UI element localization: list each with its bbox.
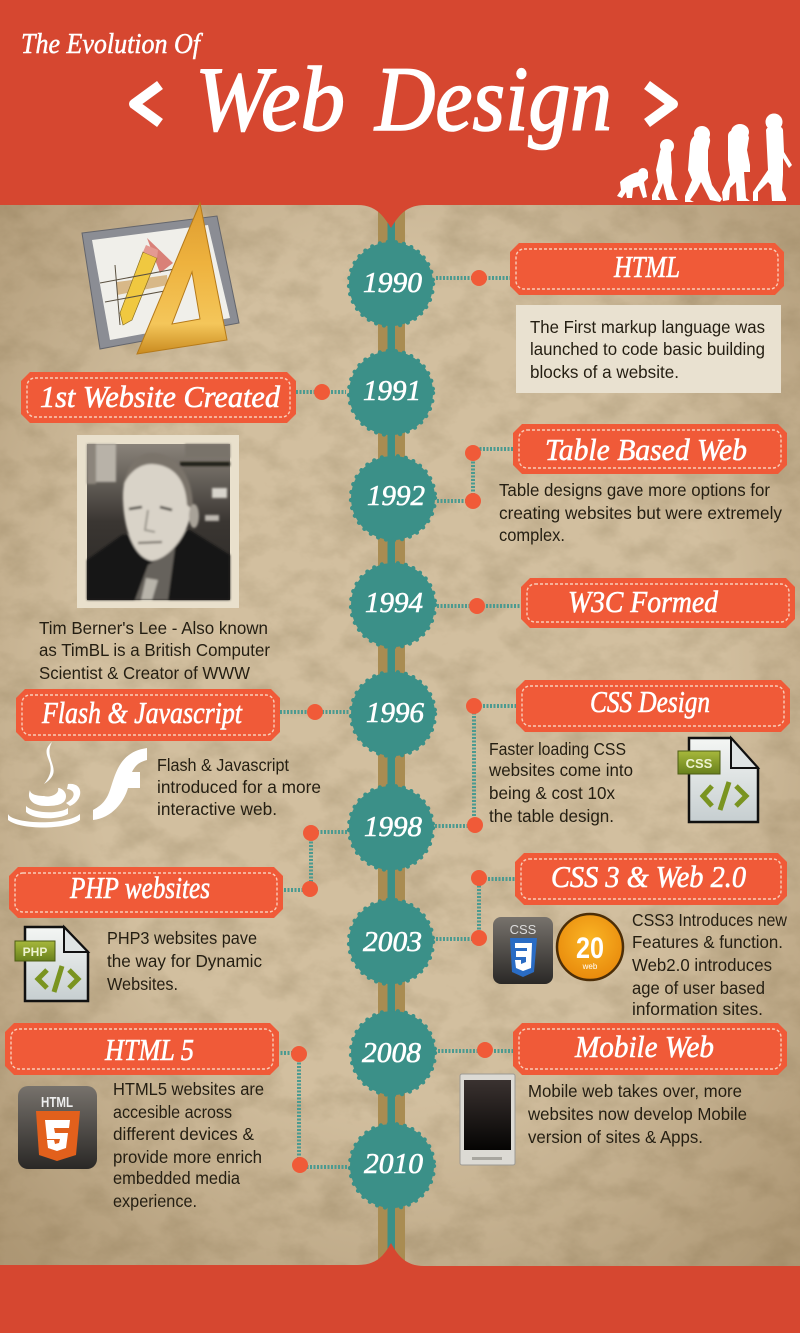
connector: 1990 to HTML bbox=[436, 270, 510, 286]
ribbon: Mobile Web: Mobile Web bbox=[574, 1029, 714, 1064]
ribbon: PHP websites: PHP websites bbox=[69, 870, 210, 905]
header banner bbox=[0, 0, 800, 228]
icon: CSS file: CSS bbox=[686, 756, 713, 771]
text: Flash description: introduced for a more bbox=[157, 777, 321, 797]
year: 2008: 2008 bbox=[362, 1038, 421, 1069]
year: 1991 bbox=[349, 351, 433, 435]
connector: 1998 to PHP bbox=[283, 825, 347, 897]
text: Flash description bbox=[157, 755, 321, 819]
ribbon: HTML 5: HTML 5 bbox=[104, 1032, 194, 1067]
ribbon: CSS 3 & Web 2.0 bbox=[515, 853, 787, 905]
text: HTML description: launched to code basic building bbox=[530, 339, 765, 359]
connector: 2003 to CSS 3 bbox=[436, 870, 515, 946]
icon: Web 2.0 badge bbox=[557, 914, 623, 980]
text: HTML 5 description: provide more enrich bbox=[113, 1147, 262, 1167]
icon: HTML5 badge: HTML bbox=[41, 1094, 73, 1111]
text: Tim Berners-Lee caption: Scientist & Creator of WWW bbox=[39, 663, 250, 683]
title: The Evolution Of: The Evolution Of bbox=[21, 28, 204, 60]
ribbon: Table Based Web: Table Based Web bbox=[545, 432, 747, 467]
year: 2003: 2003 bbox=[363, 927, 422, 958]
text: CSS Design description: the table design. bbox=[489, 806, 614, 826]
title: Web Design: Web bbox=[195, 48, 345, 150]
year: 1990 bbox=[349, 242, 433, 326]
ribbon: HTML 5 bbox=[5, 1023, 279, 1075]
ribbon: Table Based Web bbox=[513, 424, 787, 474]
year: 1996 bbox=[351, 672, 435, 756]
year: 2008 bbox=[351, 1011, 435, 1095]
year: 1998 bbox=[349, 786, 433, 870]
text: PHP description: Websites. bbox=[107, 974, 178, 994]
text: Mobile Web description: websites now develop Mobile bbox=[527, 1104, 747, 1124]
ribbon: Mobile Web bbox=[513, 1023, 787, 1075]
ribbon: W3C Formed: W3C Formed bbox=[568, 584, 718, 619]
year: 1996: 1996 bbox=[366, 698, 424, 729]
ribbon: HTML bbox=[510, 243, 784, 295]
year: 1994 bbox=[351, 563, 435, 647]
footer banner bbox=[0, 1243, 800, 1333]
ribbon: PHP websites bbox=[9, 867, 283, 918]
text: CSS Design description: websites come into bbox=[488, 760, 633, 780]
ribbon: W3C Formed bbox=[521, 578, 795, 628]
text: HTML description: blocks of a website. bbox=[530, 362, 679, 382]
icon: Web 2.0 badge: 20 bbox=[576, 932, 604, 965]
text: HTML 5 description: different devices & bbox=[113, 1124, 254, 1144]
text: HTML 5 description: accesible across bbox=[113, 1102, 232, 1122]
text: Tim Berners-Lee caption: Tim Berner's Lee - Also known bbox=[39, 618, 268, 638]
icon: CSS3 badge bbox=[493, 917, 553, 984]
icon: evolution of man bbox=[617, 114, 792, 202]
text: Table Based Web description: complex. bbox=[499, 525, 565, 545]
year: 1992: 1992 bbox=[367, 481, 425, 512]
year: 1994: 1994 bbox=[365, 588, 423, 619]
title: Web Design bbox=[134, 48, 673, 150]
connector: 1996 to Flash bbox=[280, 704, 349, 720]
text: Tim Berners-Lee caption bbox=[39, 618, 270, 683]
connector: 2008 to Mobile Web bbox=[438, 1042, 513, 1058]
connector: 2010 to HTML 5 bbox=[279, 1046, 347, 1173]
icon: mobile phone bbox=[460, 1074, 515, 1165]
text: CSS 3 description bbox=[632, 910, 787, 1019]
icon: CSS file bbox=[678, 738, 758, 822]
icon: CSS3 badge: CSS bbox=[510, 922, 537, 937]
text: Mobile Web description: Mobile web takes over, more bbox=[528, 1081, 742, 1101]
connector: 1991 to 1st Website bbox=[296, 384, 346, 400]
text: Flash description: interactive web. bbox=[157, 799, 277, 819]
text: HTML 5 description: HTML5 websites are bbox=[113, 1079, 264, 1099]
icon: Flash logo bbox=[93, 748, 147, 820]
text: CSS 3 description: Web2.0 introduces bbox=[632, 955, 772, 975]
text: Table Based Web description: creating websites but were extremely bbox=[499, 503, 782, 523]
year: 1991: 1991 bbox=[363, 376, 421, 407]
text: CSS 3 description: information sites. bbox=[632, 999, 763, 1019]
text: Table Based Web description bbox=[499, 480, 782, 545]
ribbon: CSS Design: CSS Design bbox=[590, 684, 710, 719]
connector: 1992 to Table Based Web bbox=[437, 445, 513, 509]
icon: blueprint and set square bbox=[82, 203, 239, 354]
year: 1990: 1990 bbox=[363, 268, 422, 299]
text: CSS Design description: being & cost 10x bbox=[489, 783, 615, 803]
text: Mobile Web description: version of sites & Apps. bbox=[528, 1127, 703, 1147]
text: Table Based Web description: Table designs gave more options for bbox=[499, 480, 770, 500]
text: CSS Design description bbox=[488, 739, 633, 826]
text: HTML 5 description: experience. bbox=[113, 1191, 197, 1211]
text: HTML description bbox=[516, 305, 781, 393]
connector: 1998 to CSS Design bbox=[435, 698, 516, 833]
icon: HTML5 badge bbox=[18, 1086, 97, 1169]
title: Web Design: Design bbox=[373, 48, 612, 150]
ribbon: 1st Website Created bbox=[21, 372, 296, 423]
text: Flash description: Flash & Javascript bbox=[157, 755, 289, 775]
text: PHP description bbox=[107, 928, 262, 994]
ribbon: CSS 3 & Web 2.0: CSS 3 & Web 2.0 bbox=[551, 859, 746, 894]
text: HTML description: The First markup language was bbox=[530, 317, 765, 337]
text: Tim Berners-Lee caption: as TimBL is a British Computer bbox=[39, 640, 270, 660]
text: PHP description: the way for Dynamic bbox=[107, 951, 262, 971]
ribbon: CSS Design bbox=[516, 680, 790, 732]
icon: PHP file: PHP bbox=[23, 945, 47, 959]
text: CSS 3 description: CSS3 Introduces new bbox=[632, 910, 787, 930]
text: CSS 3 description: Features & function. bbox=[632, 932, 783, 952]
photo: Tim Berners-Lee bbox=[77, 435, 239, 608]
text: HTML 5 description: embedded media bbox=[113, 1168, 240, 1188]
year: 1992 bbox=[351, 456, 435, 540]
text: CSS 3 description: age of user based bbox=[632, 978, 765, 998]
text: PHP description: PHP3 websites pave bbox=[107, 928, 257, 948]
year: 2010 bbox=[350, 1124, 434, 1208]
connector: 1994 to W3C bbox=[437, 598, 521, 614]
icon: PHP file bbox=[15, 927, 88, 1001]
icon: Web 2.0 badge: web bbox=[582, 962, 598, 971]
icon: Java cup bbox=[8, 742, 80, 828]
timeline spine bbox=[378, 205, 405, 1265]
ribbon: HTML: HTML bbox=[613, 249, 680, 284]
year: 2010: 2010 bbox=[364, 1149, 423, 1180]
ribbon: 1st Website Created: 1st Website Created bbox=[40, 379, 280, 414]
text: CSS Design description: Faster loading CSS bbox=[489, 739, 626, 759]
year: 1998: 1998 bbox=[364, 812, 422, 843]
text: Mobile Web description bbox=[527, 1081, 747, 1147]
ribbon: Flash & Javascript bbox=[16, 689, 280, 741]
ribbon: Flash & Javascript: Flash & Javascript bbox=[41, 695, 243, 730]
text: HTML 5 description bbox=[113, 1079, 264, 1211]
year: 2003 bbox=[349, 900, 433, 984]
